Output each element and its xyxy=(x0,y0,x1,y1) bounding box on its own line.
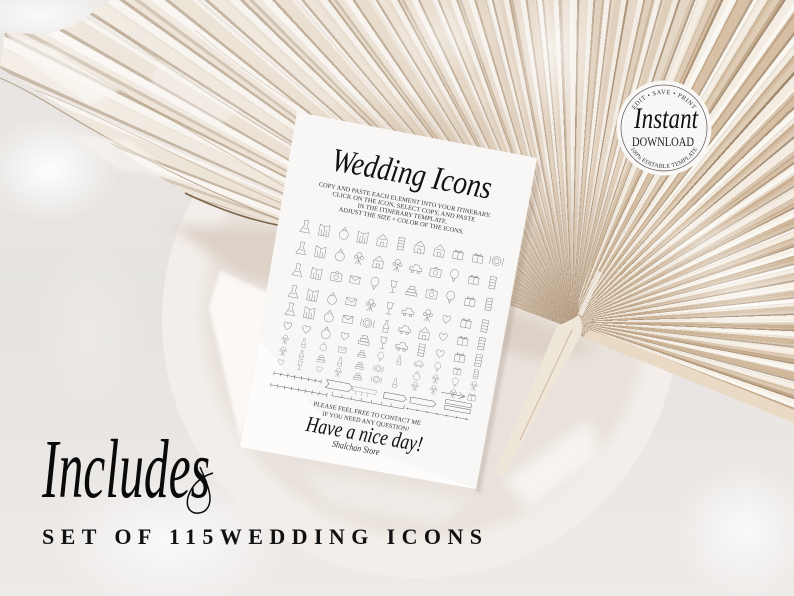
icon row 7 xyxy=(281,334,479,379)
icon row 5 xyxy=(285,302,486,350)
timeline dividers and ribbons xyxy=(270,359,473,423)
card instructions: ADJUST THE SIZE + COLOR OF THE ICONS. xyxy=(338,206,465,236)
fan cream lower band xyxy=(583,330,794,423)
shadow behind card xyxy=(475,160,541,495)
wedding icons card xyxy=(240,112,537,489)
store signature: Shalchan Store xyxy=(331,440,380,458)
closing greeting: Have a nice day! xyxy=(303,411,425,457)
icon row 9 xyxy=(277,357,476,402)
contact note: PLEASE FEEL FREE TO CONTACT ME xyxy=(313,401,422,427)
badge: instant download: 100% EDITABLE TEMPLATE xyxy=(630,147,698,168)
card instructions xyxy=(314,181,492,240)
icon row 2 xyxy=(296,241,497,289)
card instructions: COPY AND PASTE EACH ELEMENT INTO YOUR ITINERARY. xyxy=(318,181,492,219)
heading: Includes: Includes xyxy=(41,423,210,516)
palm fan leaf with radiating pleats xyxy=(0,0,794,410)
bright lit streaks on fan tips xyxy=(5,32,240,180)
icon row 6 xyxy=(283,319,483,367)
subheading: set of 115 wedding icons: SET OF 115WEDDING ICONS xyxy=(42,524,482,549)
badge: instant download xyxy=(616,80,712,176)
badge: instant download: EDIT • SAVE • PRINT xyxy=(631,90,696,110)
icon grid xyxy=(275,220,504,402)
icon row 3 xyxy=(292,262,493,311)
card instructions: IN THE ITINERARY TEMPLATE. xyxy=(357,202,448,226)
fan right section with high-contrast pleats xyxy=(578,0,794,410)
fan stem xyxy=(495,272,600,477)
fan left section creases xyxy=(0,25,310,226)
heading: Includes xyxy=(41,423,213,516)
badge: instant download: DOWNLOAD xyxy=(632,134,694,149)
badge: instant download: Instant xyxy=(633,102,699,135)
icon row 8 xyxy=(279,346,478,391)
card instructions: CLICK ON THE ICON, SELECT COPY, AND PASTE xyxy=(332,191,476,224)
icon row 4 xyxy=(288,285,489,332)
card title: Wedding Icons xyxy=(329,142,495,207)
icon row 1 xyxy=(300,220,504,268)
contact note: IF YOU NEED ANY QUESTION! xyxy=(322,410,410,433)
